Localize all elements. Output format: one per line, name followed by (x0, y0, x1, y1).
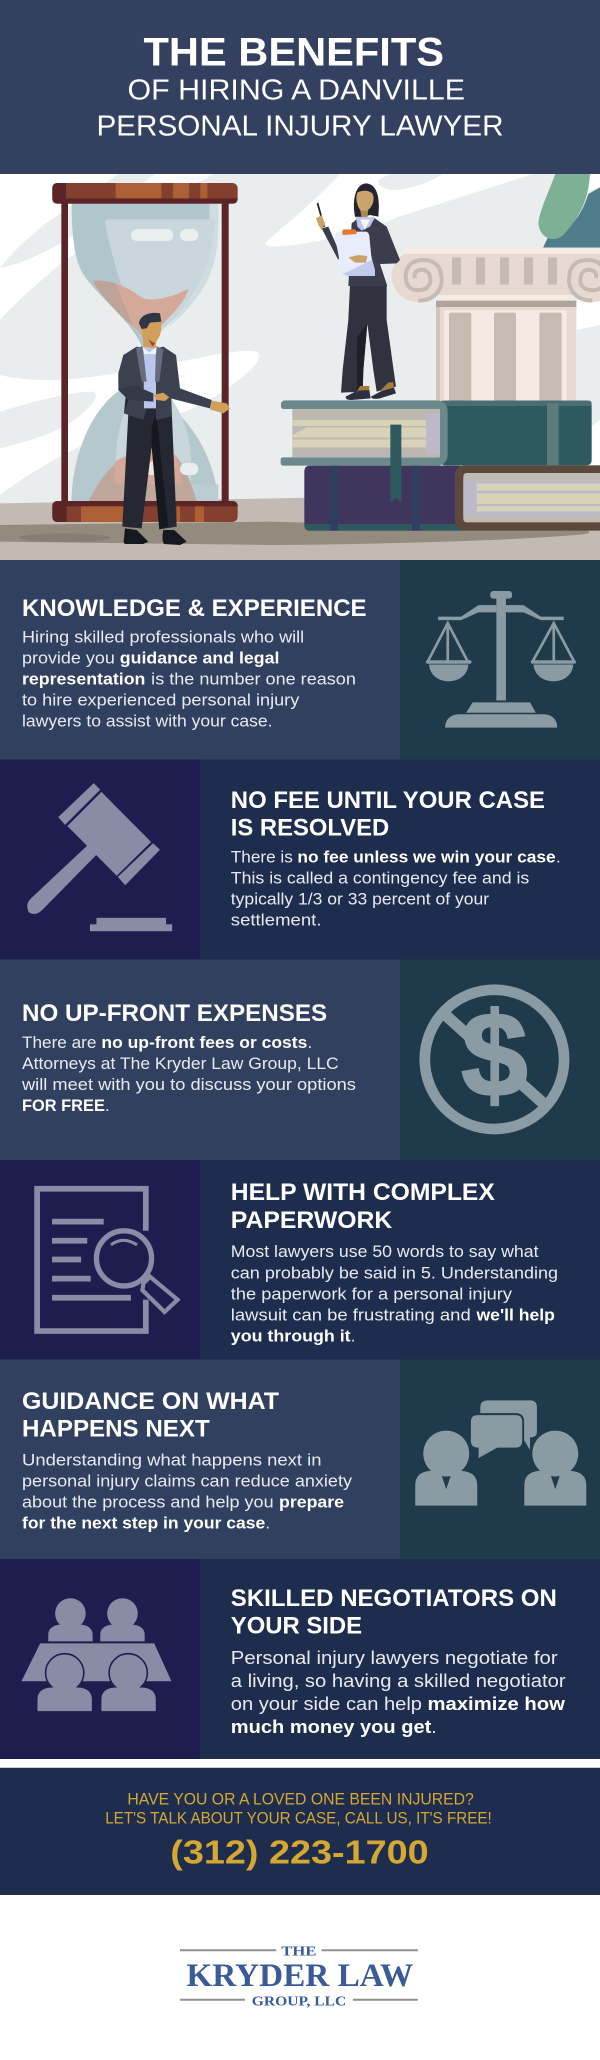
body text: typically 1/3 or 33 percent of your (231, 889, 489, 908)
panel: knowledge and experience (0, 560, 600, 760)
body text: is the number one reason (151, 669, 356, 688)
body text: . (105, 1096, 110, 1115)
body text: Most lawyers use 50 words to say what (231, 1242, 539, 1261)
body text (231, 1647, 566, 1737)
body text: Attorneys at The Kryder Law Group, LLC (22, 1054, 339, 1073)
body text (22, 1450, 353, 1532)
body text: There is (231, 847, 293, 866)
icon: crossed-out dollar sign: $ (461, 989, 528, 1122)
body text: provide you (22, 648, 115, 667)
body text: can probably be said in 5. Understanding (231, 1263, 558, 1282)
column (392, 248, 600, 404)
title: OF HIRING A DANVILLE (128, 75, 465, 107)
phone number: (312) 223-1700 (170, 1834, 429, 1871)
body text: the paperwork for a personal injury (231, 1284, 513, 1303)
body text: . (556, 847, 561, 866)
body text: to hire experienced personal injury (22, 690, 300, 709)
body text: you through it (231, 1326, 351, 1345)
panel: guidance on what happens next (0, 1360, 600, 1559)
body text: Understanding what happens next in (22, 1450, 322, 1469)
logo: The Kryder Law Group, LLC: GROUP, LLC (252, 1994, 346, 2009)
body text: prepare (279, 1492, 344, 1512)
body text: Hiring skilled professionals who will (22, 627, 304, 646)
heading: KNOWLEDGE & EXPERIENCE (22, 595, 367, 622)
body text: There are (22, 1033, 96, 1052)
title: THE BENEFITS (144, 30, 444, 74)
body text: lawsuit can be frustrating and (231, 1305, 471, 1324)
body text: lawyers to assist with your case. (22, 712, 272, 730)
heading: SKILLED NEGOTIATORS ON (231, 1585, 557, 1612)
body text: for the next step in your case (22, 1514, 265, 1532)
panel: no fee until your case is resolved (0, 760, 600, 960)
body text (231, 1242, 558, 1345)
heading: HELP WITH COMPLEX (231, 1179, 495, 1206)
header banner (0, 0, 600, 174)
heading: IS RESOLVED (231, 814, 389, 842)
body text: on your side can help (231, 1693, 422, 1714)
heading (22, 1388, 279, 1442)
body text: no fee unless we win your case (297, 847, 556, 866)
stacked books (281, 400, 600, 531)
heading: HAPPENS NEXT (22, 1415, 210, 1442)
title (96, 30, 504, 143)
body text: FOR FREE (22, 1096, 105, 1115)
title: PERSONAL INJURY LAWYER (96, 111, 504, 143)
heading: GUIDANCE ON WHAT (22, 1388, 279, 1415)
body text: settlement. (231, 910, 322, 930)
call to action banner (0, 1767, 600, 1895)
body text: maximize how (428, 1693, 566, 1714)
heading (231, 787, 545, 842)
panel: skilled negotiators on your side (0, 1559, 600, 1759)
body text: Personal injury lawyers negotiate for (231, 1647, 558, 1668)
icon: two people talking (415, 1400, 586, 1506)
body text: . (351, 1326, 356, 1345)
body text: a living, so having a skilled negotiator (231, 1670, 566, 1691)
hourglass (52, 183, 238, 522)
body text (22, 627, 356, 730)
heading: YOUR SIDE (231, 1612, 362, 1639)
body text (21, 1033, 356, 1115)
illustration: lawyers with hourglass, column and books (0, 174, 600, 560)
icon: gavel (27, 783, 172, 931)
man in suit (118, 313, 230, 545)
body text: This is called a contingency fee and is (231, 868, 529, 887)
call to action text: LET'S TALK ABOUT YOUR CASE, CALL US, IT'S FREE! (105, 1809, 492, 1827)
ground (0, 497, 600, 560)
call to action text: HAVE YOU OR A LOVED ONE BEEN INJURED? (127, 1790, 474, 1808)
logo: The Kryder Law Group, LLC (180, 1945, 418, 2009)
body text (231, 847, 561, 930)
logo: The Kryder Law Group, LLC: THE (281, 1945, 316, 1960)
icon: people around a table (21, 1598, 171, 1711)
body text: much money you get (231, 1716, 431, 1737)
woman with clipboard (316, 183, 400, 400)
body text: representation (22, 669, 145, 688)
heading: PAPERWORK (231, 1207, 393, 1234)
heading: NO FEE UNTIL YOUR CASE (231, 787, 545, 814)
body text: we'll help (475, 1305, 555, 1324)
body text: . (308, 1033, 312, 1052)
logo: The Kryder Law Group, LLC: KRYDER LAW (186, 1958, 413, 1994)
body text: . (431, 1716, 437, 1737)
body text: will meet with you to discuss your options (21, 1075, 356, 1094)
call to action text (105, 1790, 492, 1827)
panel: no up-front expenses (0, 960, 600, 1160)
body text: no up-front fees or costs (101, 1033, 307, 1052)
body text: guidance and legal (120, 648, 279, 667)
body text: . (265, 1514, 270, 1532)
heading (231, 1585, 557, 1639)
panel: help with complex paperwork (0, 1160, 600, 1360)
heading: NO UP-FRONT EXPENSES (22, 1000, 327, 1027)
plant leaves (538, 174, 600, 248)
body text: personal injury claims can reduce anxiety (22, 1471, 353, 1490)
body text: about the process and help you (22, 1492, 274, 1512)
icon: document with magnifier (37, 1189, 178, 1331)
icon: scales of justice (426, 591, 576, 728)
heading (231, 1179, 495, 1234)
icon: crossed-out dollar sign (425, 989, 564, 1129)
